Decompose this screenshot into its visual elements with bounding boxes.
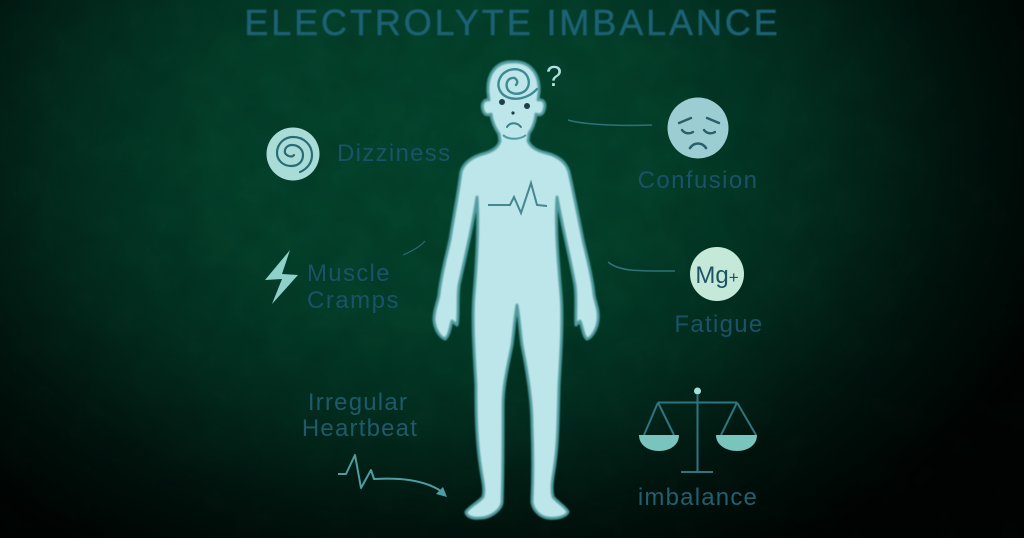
label (302, 389, 418, 442)
label: Heartbeat (302, 415, 418, 442)
panel: dizziness (266, 128, 451, 180)
question mark: ? (546, 61, 562, 93)
label: Fatigue (674, 311, 764, 338)
icon: sad face (668, 98, 728, 158)
title: ELECTROLYTE IMBALANCE (244, 2, 781, 43)
label: Muscle (307, 260, 391, 287)
chin line (503, 135, 526, 139)
head spiral (498, 69, 537, 99)
connector line (403, 241, 425, 255)
arrow: heartbeat trace (338, 455, 447, 497)
icon: spiral (266, 128, 320, 180)
label: Cramps (307, 287, 400, 314)
body silhouette (434, 62, 598, 518)
human body figure (434, 62, 598, 518)
panel: fatigue (608, 247, 764, 338)
icon: scales (639, 388, 757, 472)
label: Irregular (308, 389, 408, 416)
eyes and nose (499, 99, 530, 115)
icon: Mg+ badge: Mg+ (695, 262, 739, 289)
frown (507, 123, 521, 127)
label (307, 260, 400, 314)
label: Confusion (638, 167, 758, 194)
connector line (568, 120, 652, 125)
icon: lightning bolt (265, 250, 298, 304)
chest heartbeat (488, 183, 547, 213)
panel: irregular heartbeat (302, 389, 447, 497)
panel: muscle cramps (265, 241, 425, 314)
label: imbalance (638, 484, 758, 511)
panel: imbalance (638, 388, 758, 511)
panel: confusion (568, 98, 758, 194)
icon: Mg+ badge (690, 247, 744, 301)
label: Dizziness (337, 140, 451, 167)
connector line (608, 262, 675, 271)
